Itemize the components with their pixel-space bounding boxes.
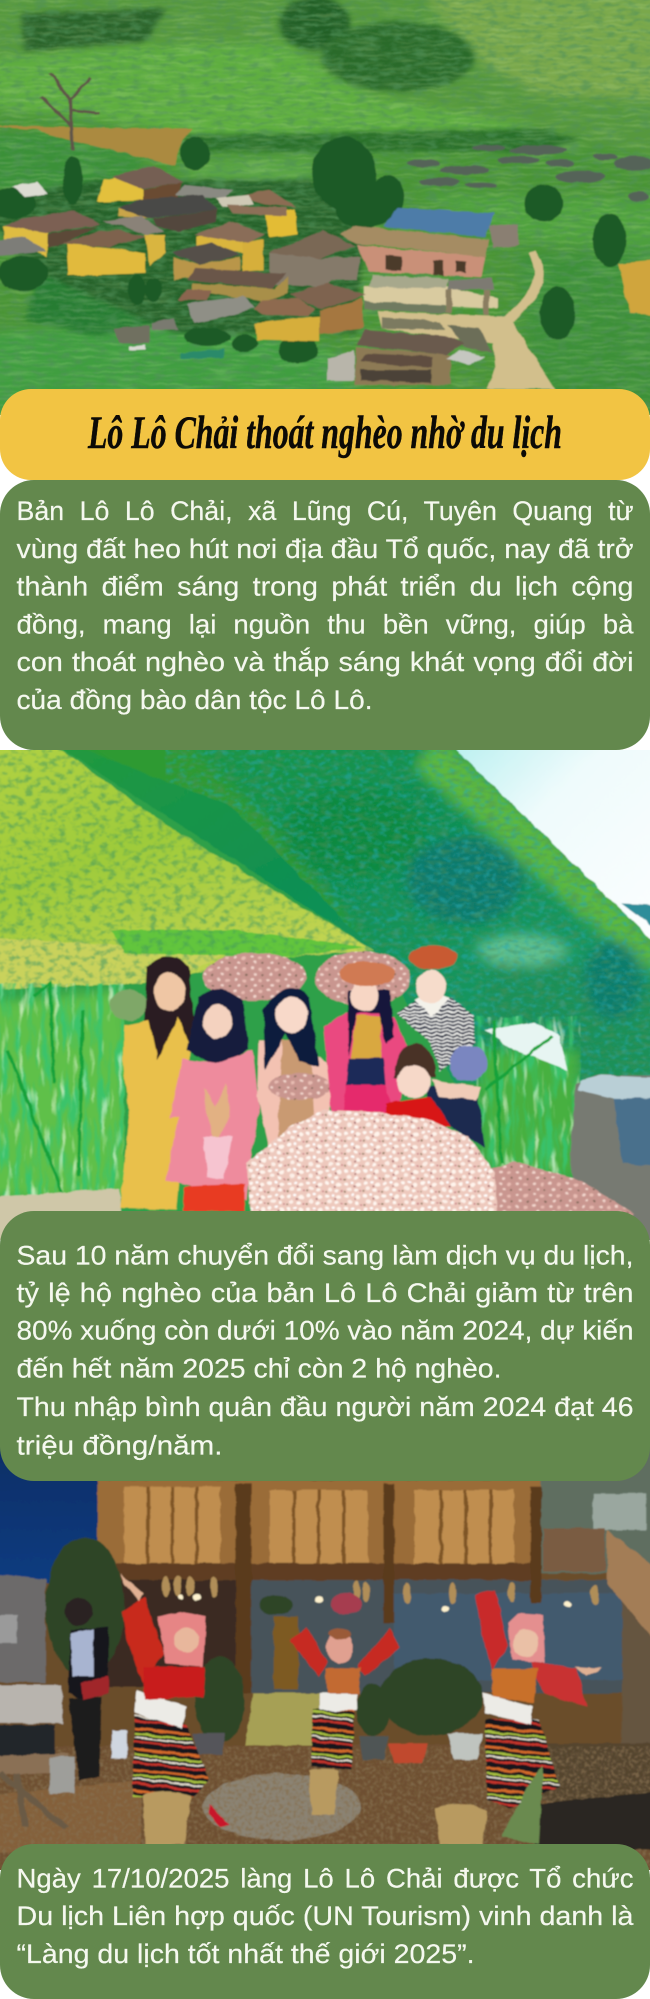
award paragraph: “Làng du lịch tốt nhất thế giới 2025”.	[16, 1939, 474, 1969]
sky	[456, 750, 650, 940]
right extension and staircase	[540, 1448, 650, 1575]
firewood and leaves	[502, 1767, 650, 1850]
stone pillar	[570, 1075, 650, 1250]
statistics paragraph: Sau 10 năm chuyển đổi sang làm dịch vụ du lịch,	[16, 1240, 634, 1270]
photo: Lô Lô dancers performing at night in front of a stilt house	[0, 1413, 650, 1880]
night sky	[0, 1448, 99, 1584]
photo: Lô Lô Chải village on green hillside	[0, 0, 650, 433]
sunlit left hillside	[0, 730, 373, 990]
intro paragraph: vùng đất heo hút nơi địa đầu Tổ quốc, nay đã trở	[16, 534, 634, 564]
trees	[0, 137, 626, 364]
photo: Lô Lô girls with buckwheat flowers on the mountainside	[0, 750, 650, 1240]
beams and posts	[99, 1563, 541, 1580]
road edge	[0, 1187, 122, 1240]
grey house at left	[0, 1572, 46, 1683]
award paragraph: Du lịch Liên hợp quốc (UN Tourism) vinh danh là	[16, 1901, 634, 1931]
village houses	[0, 166, 518, 385]
woman in zigzag vest with bouquet	[396, 945, 487, 1148]
left dancer	[120, 1573, 230, 1827]
man by the sound desk	[65, 1598, 109, 1780]
girl in cream coat holding flowers	[257, 988, 332, 1150]
title banner	[0, 389, 650, 480]
woven baskets	[143, 1769, 487, 1845]
wooden upper floor	[96, 1481, 542, 1565]
pots	[112, 1730, 483, 1763]
intro paragraph: thành điểm sáng trong phát triển du lịch cộng	[16, 572, 634, 602]
statistics paragraph: đến hết năm 2025 chỉ còn 2 hộ nghèo.	[16, 1354, 502, 1384]
intro paragraph: Bản Lô Lô Chải, xã Lũng Cú, Tuyên Quang từ	[16, 496, 634, 526]
girl in pink coat with flower hat	[323, 962, 408, 1117]
child in red	[386, 1043, 452, 1127]
intro paragraph: của đồng bào dân tộc Lô Lô.	[16, 685, 372, 715]
earthen yard	[244, 1744, 314, 1756]
award paragraph: Ngày 17/10/2025 làng Lô Lô Chải được Tổ chức	[16, 1863, 634, 1893]
statistics paragraph: Thu nhập bình quân đầu người năm 2024 đạt 46	[16, 1392, 634, 1422]
girl in pink with rabbit shirt	[166, 989, 259, 1212]
forested mountain	[66, 750, 650, 1084]
grass	[0, 982, 582, 1196]
flower baskets	[203, 953, 307, 1001]
right dancer	[475, 1590, 603, 1808]
statistics paragraph	[16, 1240, 634, 1461]
path and plants	[245, 1693, 319, 1755]
girl in yellow dress	[120, 957, 195, 1210]
ground floor wall	[106, 1578, 237, 1688]
award paragraph	[16, 1863, 634, 1969]
intro paragraph: con thoát nghèo và thắp sáng khát vọng đổi đời	[16, 647, 634, 677]
intro paragraph: đồng, mang lại nguồn thu bền vững, giúp bà	[16, 609, 634, 639]
intro paragraph	[16, 496, 634, 715]
bare tree	[41, 73, 99, 150]
hillside terraces and forest	[0, 0, 650, 433]
statistics paragraph: tỷ lệ hộ nghèo của bản Lô Lô Chải giảm từ trên	[16, 1278, 634, 1308]
panel: poverty reduction and income	[0, 1211, 650, 1481]
statistics paragraph: 80% xuống còn dưới 10% vào năm 2024, dự kiến	[16, 1316, 634, 1346]
road	[377, 250, 555, 389]
sound equipment and table	[0, 1685, 75, 1828]
limestone rocks	[406, 145, 650, 201]
dirt terrace	[0, 125, 193, 165]
buckwheat flower bush	[246, 1109, 634, 1216]
statistics paragraph: triệu đồng/năm.	[16, 1431, 222, 1461]
panel: intro text	[0, 480, 650, 750]
centre dancer	[290, 1627, 400, 1770]
panel: UN Tourism award	[0, 1844, 650, 1999]
